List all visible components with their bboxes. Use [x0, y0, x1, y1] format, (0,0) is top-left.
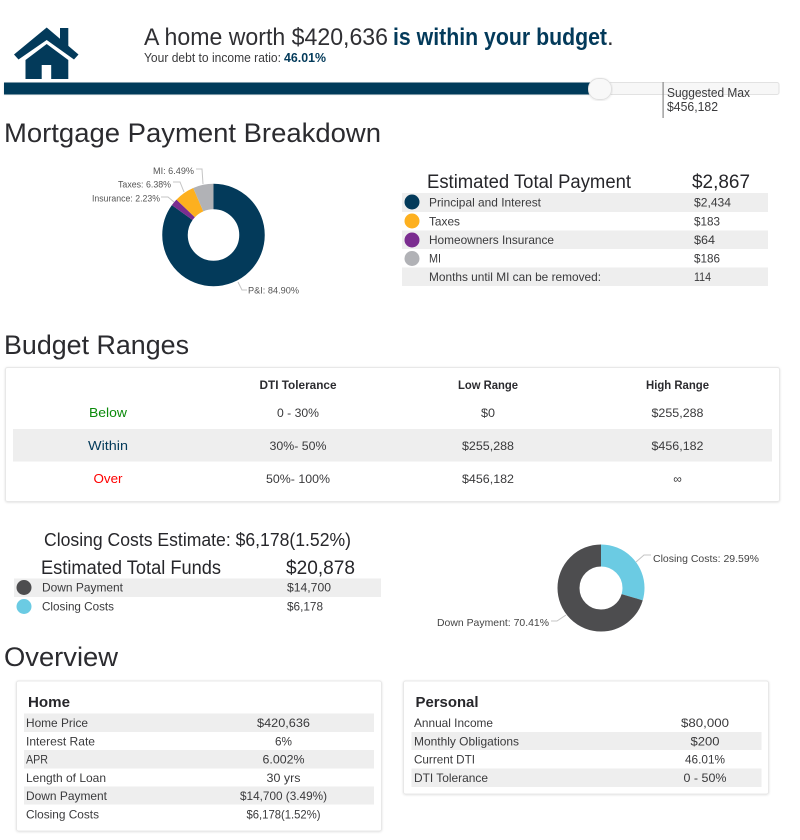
- panel: budget ranges table: $255,288: [652, 406, 704, 420]
- headline: A home worth $420,636: [144, 24, 388, 51]
- payment table: Months until MI can be removed:: [429, 270, 601, 284]
- panel: personal: [404, 681, 768, 794]
- suggested max marker: $456,182: [667, 100, 718, 114]
- panel: home: Closing Costs: [26, 808, 99, 822]
- headline: .: [607, 24, 614, 51]
- funds table: $14,700: [287, 580, 331, 594]
- funds table: Estimated Total Funds: [41, 558, 221, 579]
- donut chart: mortgage payment: P&I: 84.90%: [248, 286, 299, 296]
- payment table: $2,867: [692, 172, 750, 193]
- payment table: $186: [694, 252, 720, 266]
- panel: budget ranges table: $456,182: [462, 472, 514, 486]
- donut chart: funds: Down Payment: 70.41%: [437, 617, 549, 629]
- panel: budget ranges table: [6, 368, 780, 502]
- panel: budget ranges table: High Range: [646, 378, 709, 392]
- payment table: MI: [429, 252, 441, 266]
- payment table: Taxes: [429, 214, 460, 228]
- heading: overview: Overview: [4, 642, 118, 672]
- panel: budget ranges table: $456,182: [652, 439, 704, 453]
- panel: budget ranges table: Over: [94, 471, 123, 486]
- funds table: Closing Costs: [42, 600, 114, 614]
- panel: home: $6,178(1.52%): [246, 808, 320, 822]
- panel: budget ranges table: Within: [88, 438, 128, 453]
- funds table: $6,178: [287, 600, 323, 614]
- debt to income ratio: 46.01%: [284, 51, 326, 65]
- donut chart: funds: [437, 553, 759, 629]
- panel: personal: Monthly Obligations: [414, 734, 519, 748]
- panel: budget ranges table: DTI Tolerance: [260, 378, 337, 392]
- donut chart: mortgage payment: Insurance: 2.23%: [92, 194, 160, 204]
- debt to income ratio: Your debt to income ratio:: [144, 51, 281, 65]
- panel: home: 30 yrs: [266, 771, 300, 785]
- headline: is within your budget: [393, 24, 607, 51]
- suggested max marker: Suggested Max: [667, 86, 751, 100]
- panel: budget ranges table: Below: [89, 405, 128, 420]
- funds table: [14, 558, 381, 614]
- panel: home: Interest Rate: [26, 734, 95, 748]
- payment table: $2,434: [694, 196, 731, 210]
- closing costs estimate: Closing Costs Estimate: $6,178(1.52%): [44, 530, 351, 550]
- payment table: $183: [694, 214, 720, 228]
- panel: home: $420,636: [257, 716, 310, 730]
- heading: mortgage payment breakdown: Mortgage Payment Breakdown: [4, 118, 381, 148]
- slider: [4, 78, 779, 100]
- funds table: Down Payment: [42, 580, 124, 594]
- payment table: Principal and Interest: [429, 196, 542, 210]
- panel: home: 6.002%: [262, 752, 305, 766]
- suggested max marker: [662, 82, 751, 118]
- icon: house: [14, 28, 78, 79]
- panel: personal: Personal: [416, 694, 478, 711]
- headline: [144, 24, 614, 51]
- panel: personal: Annual Income: [414, 716, 493, 730]
- panel: home: [16, 681, 382, 831]
- donut chart: mortgage payment: MI: 6.49%: [153, 166, 194, 176]
- panel: budget ranges table: 50%- 100%: [266, 472, 330, 486]
- donut chart: mortgage payment: [92, 166, 299, 296]
- panel: budget ranges table: 30%- 50%: [270, 439, 327, 453]
- payment table: Homeowners Insurance: [429, 233, 554, 247]
- payment table: Estimated Total Payment: [427, 172, 632, 193]
- donut chart: funds: Closing Costs: 29.59%: [653, 553, 759, 565]
- panel: personal: Current DTI: [414, 752, 475, 766]
- panel: home: Home: [28, 694, 70, 711]
- payment table: $64: [694, 233, 715, 247]
- panel: home: 6%: [275, 734, 292, 748]
- panel: home: Down Payment: [26, 789, 108, 803]
- heading: budget ranges: Budget Ranges: [4, 330, 189, 360]
- panel: home: APR: [26, 752, 48, 766]
- panel: home: Home Price: [26, 716, 88, 730]
- panel: budget ranges table: $255,288: [462, 439, 514, 453]
- panel: budget ranges table: 0 - 30%: [277, 406, 319, 420]
- payment table: [402, 172, 768, 286]
- funds table: $20,878: [286, 558, 355, 579]
- panel: personal: DTI Tolerance: [414, 771, 488, 785]
- panel: personal: 46.01%: [685, 752, 725, 766]
- panel: budget ranges table: ∞: [673, 472, 682, 486]
- panel: budget ranges table: Low Range: [458, 378, 518, 392]
- payment table: 114: [694, 270, 711, 284]
- panel: personal: $200: [690, 734, 720, 748]
- panel: home: $14,700 (3.49%): [240, 789, 327, 803]
- panel: budget ranges table: $0: [481, 406, 495, 420]
- panel: personal: 0 - 50%: [684, 771, 727, 785]
- panel: home: Length of Loan: [26, 771, 106, 785]
- panel: personal: $80,000: [681, 716, 729, 730]
- donut chart: mortgage payment: Taxes: 6.38%: [118, 180, 171, 190]
